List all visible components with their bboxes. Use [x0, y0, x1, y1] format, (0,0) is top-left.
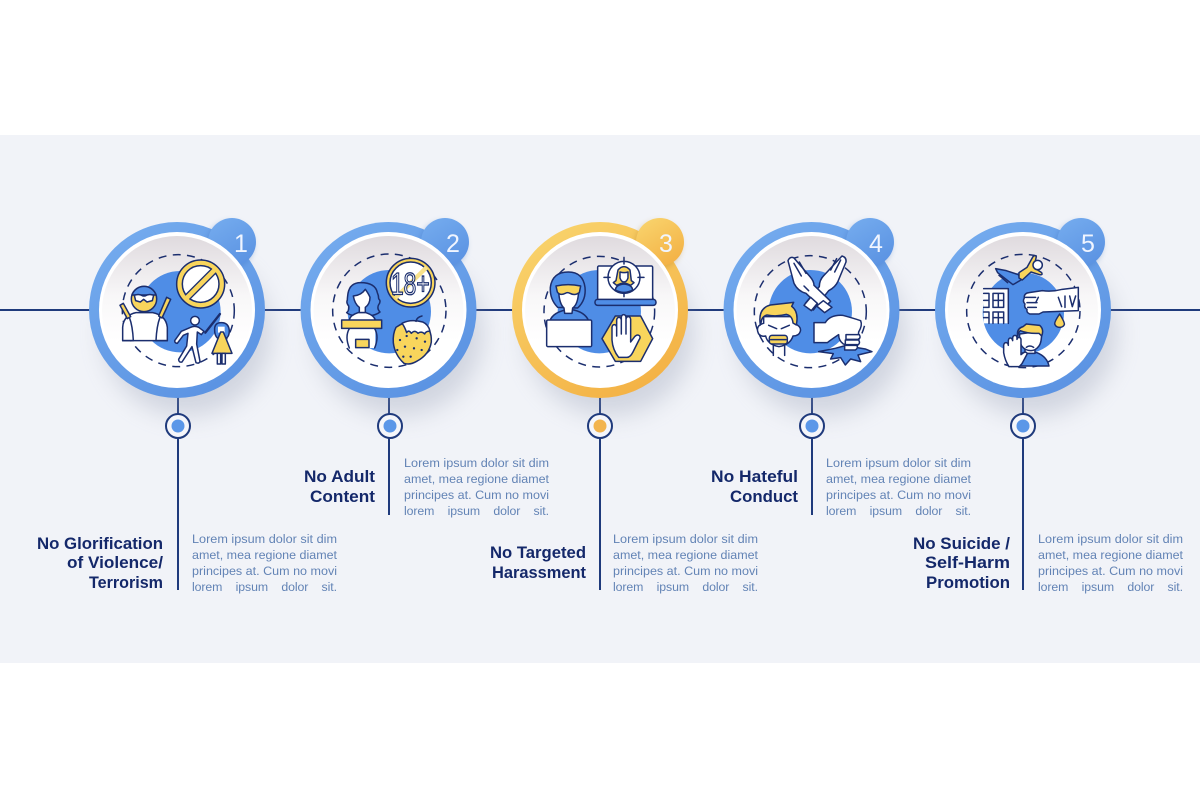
badge 3	[634, 218, 684, 269]
text block 5	[1038, 532, 1184, 594]
heading 2: No Adult	[304, 467, 375, 486]
icon: no adult content: 18+	[391, 267, 430, 302]
heading 5: No Suicide /	[913, 534, 1010, 553]
ring 1	[89, 222, 265, 398]
text block 5: lorem ipsum dolor sit.	[1038, 580, 1183, 594]
text block 4: amet, mea regione diamet	[826, 472, 972, 486]
text block 3: principes at. Cum no movi	[613, 564, 758, 578]
inner disc 2	[310, 232, 466, 388]
text block 4: lorem ipsum dolor sit.	[826, 504, 971, 518]
timeline horizontal line	[0, 309, 1200, 311]
step 2 panel	[300, 218, 550, 518]
connector dot 4	[800, 414, 824, 438]
badge 5	[1055, 218, 1105, 269]
number 1: 1	[234, 230, 248, 258]
inner disc 3	[522, 232, 678, 388]
text block 2: Lorem ipsum dolor sit dim	[404, 456, 549, 470]
heading 1: of Violence/	[67, 553, 163, 572]
ring 4	[724, 222, 900, 398]
step 1 panel	[37, 218, 338, 594]
number 3: 3	[659, 230, 673, 258]
icon: no suicide or self-harm promotion	[967, 254, 1080, 368]
heading 1	[37, 534, 163, 592]
connector dot 1	[166, 414, 190, 438]
heading 2: Content	[310, 487, 375, 506]
text block 5: Lorem ipsum dolor sit dim	[1038, 532, 1183, 546]
text block 4: Lorem ipsum dolor sit dim	[826, 456, 971, 470]
text block 2: lorem ipsum dolor sit.	[404, 504, 549, 518]
heading 3: No Targeted	[490, 543, 586, 562]
heading 4: No Hateful	[711, 467, 798, 486]
icon: no targeted harassment	[544, 256, 656, 367]
heading 4	[711, 467, 798, 506]
heading 5: Self-Harm	[925, 553, 1010, 572]
text block 1: amet, mea regione diamet	[192, 548, 338, 562]
heading 5	[913, 534, 1010, 592]
text block 4: principes at. Cum no movi	[826, 488, 971, 502]
text block 1	[192, 532, 338, 594]
text block 3	[613, 532, 759, 594]
text block 2	[404, 456, 550, 518]
text block 5: principes at. Cum no movi	[1038, 564, 1183, 578]
background panel	[0, 135, 1200, 663]
badge 4	[844, 218, 894, 269]
heading 3: Harassment	[492, 563, 586, 582]
text block 1: Lorem ipsum dolor sit dim	[192, 532, 337, 546]
text block 5: amet, mea regione diamet	[1038, 548, 1184, 562]
connector dot 2	[378, 414, 402, 438]
step 3 panel	[490, 218, 759, 594]
inner disc 4	[734, 232, 890, 388]
icon: no adult content	[333, 254, 446, 367]
ring 3	[512, 222, 688, 398]
inner disc 1	[99, 232, 255, 388]
text block 2: principes at. Cum no movi	[404, 488, 549, 502]
heading 4: Conduct	[730, 487, 798, 506]
text block 3: Lorem ipsum dolor sit dim	[613, 532, 758, 546]
heading 1: Terrorism	[89, 573, 163, 592]
text block 3: amet, mea regione diamet	[613, 548, 759, 562]
ring 5	[935, 222, 1111, 398]
badge 2	[419, 218, 469, 269]
heading 3	[490, 543, 586, 582]
ring 2	[300, 222, 476, 398]
text block 1: lorem ipsum dolor sit.	[192, 580, 337, 594]
connector dot 5	[1011, 414, 1035, 438]
number 5: 5	[1081, 230, 1095, 258]
number 4: 4	[869, 230, 883, 258]
heading 5: Promotion	[926, 573, 1010, 592]
heading 2	[304, 467, 375, 506]
text block 3: lorem ipsum dolor sit.	[613, 580, 758, 594]
text block 2: amet, mea regione diamet	[404, 472, 550, 486]
icon: no glorification of violence	[120, 255, 234, 367]
step 4 panel	[711, 218, 972, 518]
inner disc 5	[945, 232, 1101, 388]
number 2: 2	[446, 230, 460, 258]
icon: no hateful conduct	[754, 256, 872, 368]
step 5 panel	[913, 218, 1184, 594]
text block 4	[826, 456, 972, 518]
text block 1: principes at. Cum no movi	[192, 564, 337, 578]
connector dot 3	[588, 414, 612, 438]
badge 1	[206, 218, 256, 269]
heading 1: No Glorification	[37, 534, 163, 553]
